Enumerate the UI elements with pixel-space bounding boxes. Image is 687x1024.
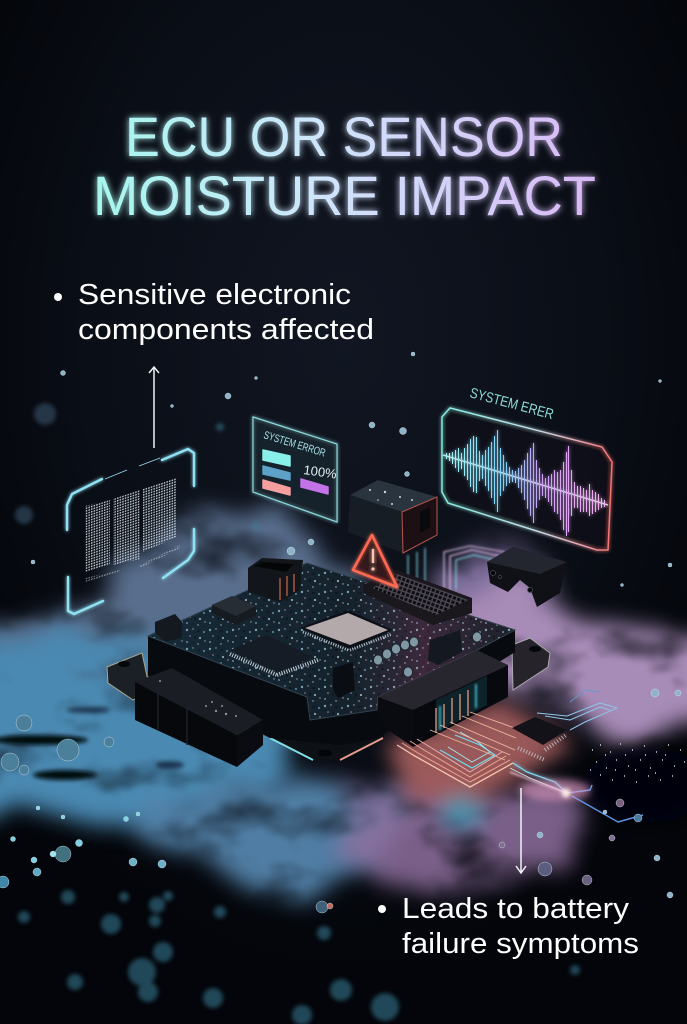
mounting tab bottom <box>270 730 385 762</box>
arrow down <box>516 788 526 873</box>
waveform heading: SYSTEM ERER <box>468 385 555 423</box>
board tint <box>148 563 515 720</box>
surface chip <box>512 717 567 760</box>
cube left <box>348 495 403 553</box>
panel: waveform <box>442 385 612 550</box>
spark <box>510 772 591 801</box>
capacitors <box>374 632 482 677</box>
waveform frame <box>442 408 612 550</box>
cube slot <box>420 507 430 533</box>
sensor body <box>487 547 567 607</box>
bokeh droplets <box>15 403 580 1024</box>
fog: blue left <box>0 630 300 818</box>
board side <box>148 630 515 745</box>
water droplets <box>0 352 685 1024</box>
small ic block <box>212 596 256 625</box>
relay <box>428 630 462 665</box>
arrow up <box>149 367 159 448</box>
connector right <box>378 650 508 747</box>
circuit traces <box>397 690 643 822</box>
cube drops <box>369 489 413 505</box>
traces to chip <box>397 690 643 822</box>
ecu board <box>107 558 575 828</box>
central block <box>333 662 355 698</box>
bullet <box>54 293 62 301</box>
fog cloud <box>0 515 687 895</box>
bullet <box>378 905 386 913</box>
title: ECU OR SENSOR <box>125 105 563 168</box>
connector left <box>135 668 263 767</box>
hologram dashed line <box>105 458 160 479</box>
panel heading: SYSTEM ERROR <box>262 429 327 460</box>
callout: sensitive components <box>54 279 374 346</box>
panel frame <box>253 417 337 522</box>
callout text: Leads to battery <box>402 893 630 925</box>
waveform centre line <box>443 455 608 505</box>
callout: battery failure <box>378 893 639 960</box>
callout text <box>402 893 639 960</box>
hologram brackets <box>67 449 194 614</box>
sensor top <box>487 547 567 574</box>
callout text <box>78 279 374 346</box>
panel value: 100% <box>303 462 338 482</box>
fog: purple right <box>440 575 687 735</box>
waveform lines <box>446 430 604 536</box>
sharp droplets <box>0 352 681 913</box>
warning triangle <box>353 535 397 587</box>
processor chip <box>300 610 393 650</box>
board top <box>148 563 515 720</box>
mounting tab right <box>512 638 550 690</box>
fog: purple lower <box>340 770 590 885</box>
red floor glow <box>385 700 575 828</box>
hologram data blocks <box>85 478 180 582</box>
connecting traces <box>408 546 505 592</box>
panel: system error <box>253 417 338 522</box>
callout text: components affected <box>78 314 374 346</box>
floating sensor <box>487 547 567 607</box>
sparkle field <box>590 744 685 782</box>
title: MOISTURE IMPACT <box>93 164 596 227</box>
tab hole left <box>118 661 130 667</box>
socket connector <box>363 570 472 625</box>
panel bars <box>263 450 328 495</box>
tab hole right <box>529 646 541 652</box>
cube right <box>402 497 437 553</box>
floating ecu cube <box>348 480 437 553</box>
fog: dim top <box>0 515 560 690</box>
sensor holes <box>490 570 532 592</box>
panel: data hologram <box>67 449 194 614</box>
water patches <box>0 707 184 780</box>
callout text: Sensitive electronic <box>78 279 351 311</box>
capacitor block <box>155 614 182 642</box>
mounting tab left <box>107 653 150 700</box>
fog: blue lower <box>140 775 400 895</box>
header connector <box>248 558 303 602</box>
title <box>93 105 596 227</box>
black water right <box>583 747 687 823</box>
callout text: failure symptoms <box>402 928 639 960</box>
secondary chip <box>230 635 318 675</box>
cube top <box>350 480 437 512</box>
